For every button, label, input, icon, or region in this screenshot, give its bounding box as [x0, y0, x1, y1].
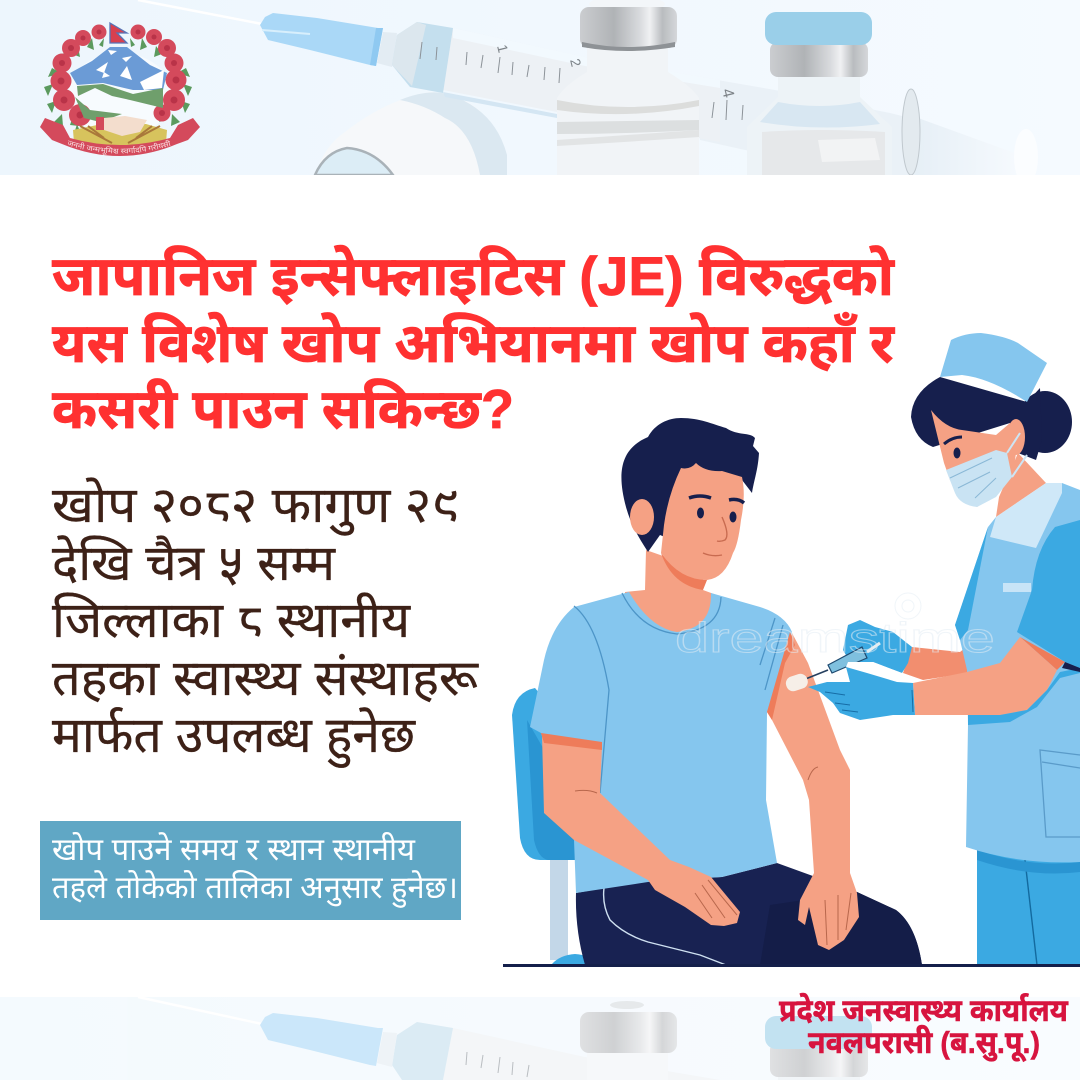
barrel numbers: 1 [494, 43, 512, 54]
header banner: syringe and vials: 2 [567, 57, 585, 68]
patient head [621, 418, 759, 590]
front glove [808, 667, 915, 720]
emblem ground and wheat [73, 124, 167, 150]
sleeve hem [968, 668, 1080, 725]
floor line [503, 964, 1080, 967]
title: जापानिज इन्सेफ्लाइटिस (JE) विरुद्धको [52, 245, 895, 307]
navy corner [1062, 662, 1080, 672]
ear [1007, 419, 1025, 455]
emblem handshake [96, 116, 147, 136]
emblem rhododendrons [50, 24, 186, 126]
emblem flag [110, 23, 127, 43]
nurse neck [996, 453, 1046, 517]
body text: मार्फत उपलब्ध हुनेछ [52, 707, 416, 768]
emblem ribbon [40, 118, 200, 156]
syringe barrel far section [700, 80, 915, 175]
syringe graduations [420, 42, 744, 120]
watermark: dreamstime [675, 614, 995, 661]
watermark [675, 593, 995, 661]
title: यस विशेष खोप अभियानमा खोप कहाँ र [52, 312, 896, 374]
patient right arm [767, 633, 859, 950]
ear [630, 499, 654, 535]
illustration: vaccination scene [503, 333, 1080, 967]
emblem mountain [70, 47, 167, 90]
arm and finger lines [575, 767, 851, 945]
nurse head [911, 333, 1072, 507]
rhododendron centres [58, 30, 180, 118]
header banner: syringe and vials [0, 0, 1080, 185]
brows [689, 496, 744, 503]
arm shadow [767, 632, 795, 720]
chair [512, 688, 600, 964]
bandage [784, 672, 810, 693]
emblem inner field [68, 53, 172, 137]
vial one [557, 114, 599, 120]
back glove [843, 620, 912, 673]
patient neck [625, 550, 722, 640]
mask [946, 433, 1027, 507]
plunger flange [902, 89, 920, 175]
body text: खोप २०८२ फागुण २९ [52, 477, 458, 536]
sleeve shadow band [1020, 637, 1065, 670]
vial two [828, 100, 846, 106]
body text: जिल्लाका ८ स्थानीय [52, 592, 411, 648]
eyes [697, 508, 704, 518]
callout: तहले तोकेको तालिका अनुसार हुनेछ। [52, 870, 458, 908]
chin shadow [661, 553, 707, 590]
syringe barrel [444, 31, 700, 138]
needle [138, 0, 262, 24]
shirt details [574, 593, 783, 793]
nurse trousers [977, 845, 1080, 965]
uniform side shading [955, 527, 988, 640]
nurse sleeve [1017, 520, 1080, 668]
sleeve shadow [541, 733, 602, 750]
emblem motto: जननी जन्मभूमिश्च स्वर्गादपि गरीयसी [68, 140, 170, 155]
eye [954, 448, 960, 458]
hair [911, 377, 1042, 460]
hair bun [1018, 391, 1072, 453]
title [52, 245, 896, 440]
footer office name: नवलपरासी (ब.सु.पू.) [808, 1025, 1040, 1062]
end flange [1014, 129, 1038, 185]
hair [621, 418, 759, 552]
face [661, 463, 744, 580]
nurse [784, 333, 1080, 965]
emblem of Nepal [40, 22, 200, 156]
gap between gloves [846, 662, 913, 682]
pocket [1040, 750, 1080, 837]
nose and mouth [703, 517, 727, 556]
patient left arm [542, 735, 740, 926]
collar [990, 483, 1062, 548]
round vial [315, 92, 507, 175]
name tag [1003, 583, 1031, 592]
patient trousers [576, 863, 922, 965]
body text [52, 477, 479, 768]
footer banner [0, 997, 1080, 1080]
body text: तहका स्वास्थ्य संस्थाहरू [52, 650, 479, 706]
nurse back arm [903, 640, 975, 680]
title: कसरी पाउन सकिन्छ? [52, 378, 514, 440]
nurse front arm [913, 637, 1057, 715]
header banner: syringe and vials: 4 [718, 87, 737, 100]
callout [40, 821, 461, 920]
nurse uniform [955, 483, 1080, 862]
face [931, 410, 1018, 507]
syringe hub [260, 13, 383, 66]
brow [944, 437, 962, 444]
callout: खोप पाउने समय र स्थान स्थानीय [52, 832, 416, 867]
emblem wreath leaves [44, 38, 192, 134]
syringe connector [377, 32, 397, 67]
cap [940, 333, 1047, 402]
syringe [803, 643, 880, 680]
plunger [920, 119, 1016, 175]
patient shirt [530, 592, 792, 893]
footer office name [779, 993, 1069, 1062]
body text: देखि चैत्र ५ सम्म [52, 535, 336, 591]
glove creases [825, 690, 913, 712]
emblem hills [77, 84, 163, 108]
syringe tinted shoulder [392, 22, 453, 93]
